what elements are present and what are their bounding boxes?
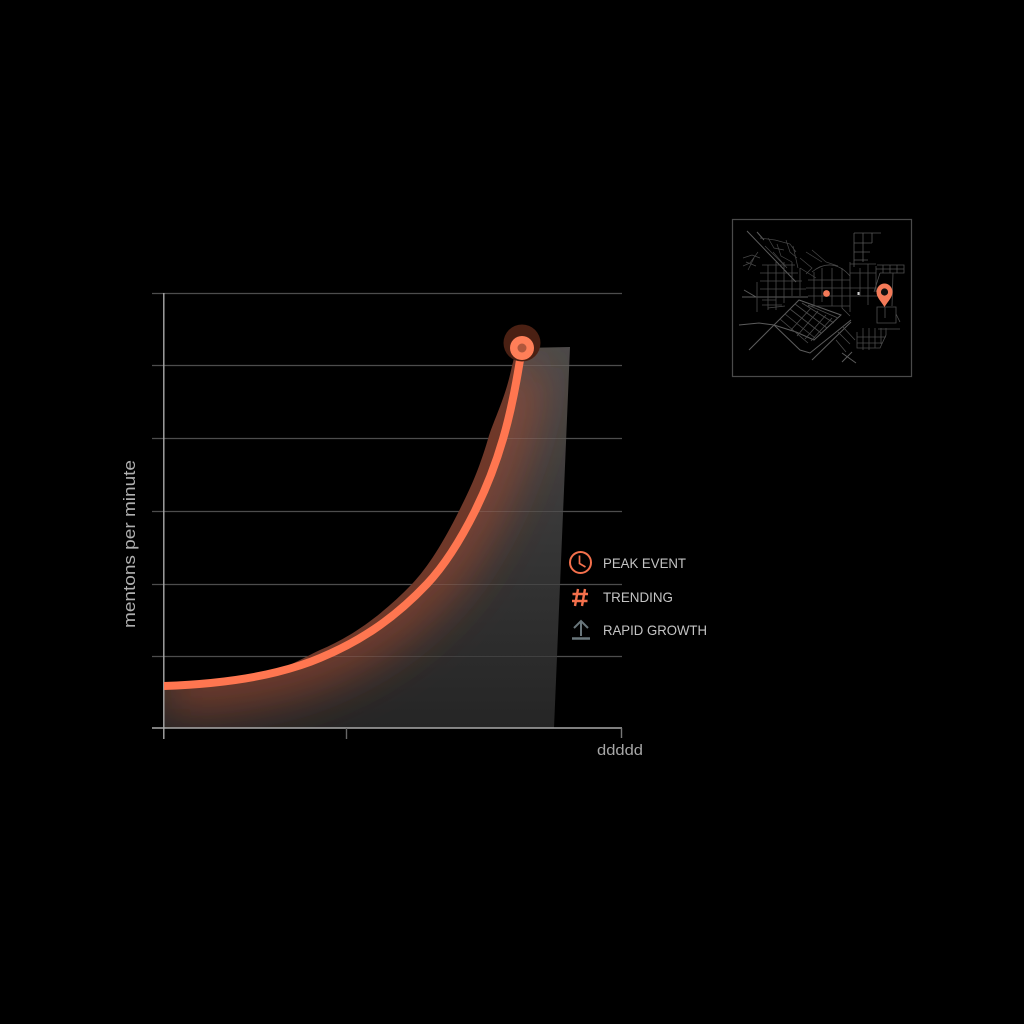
icon: hash [572,589,588,606]
legend item: trending: TRENDING [603,589,673,605]
axes [152,293,622,739]
lower right grid [836,327,886,352]
legend [570,552,707,638]
exponential curve [164,348,522,686]
icon: clock [570,552,591,573]
diagonal block streets [757,262,838,343]
legend item: rapid growth: RAPID GROWTH [603,622,707,638]
right block [874,265,904,329]
top right grid [854,233,881,267]
street network [739,231,904,363]
curve shadow band [262,350,522,675]
map panel [732,220,912,376]
upper left small streets [743,238,838,278]
grid lines [152,294,622,656]
icon: location pin [876,284,892,307]
central streets [806,262,880,316]
map dot [823,290,830,297]
x axis label: ddddd [597,743,643,759]
shaded area under curve [164,347,570,728]
legend item: peak event: PEAK EVENT [603,555,686,571]
map frame [732,220,912,376]
line chart [152,293,622,739]
grid lines over area [332,365,569,657]
main roads [739,231,856,363]
peak marker [504,324,540,362]
y axis label: mentons per minute [120,460,139,628]
icon: up arrow [572,621,590,638]
small white dot [858,292,860,295]
